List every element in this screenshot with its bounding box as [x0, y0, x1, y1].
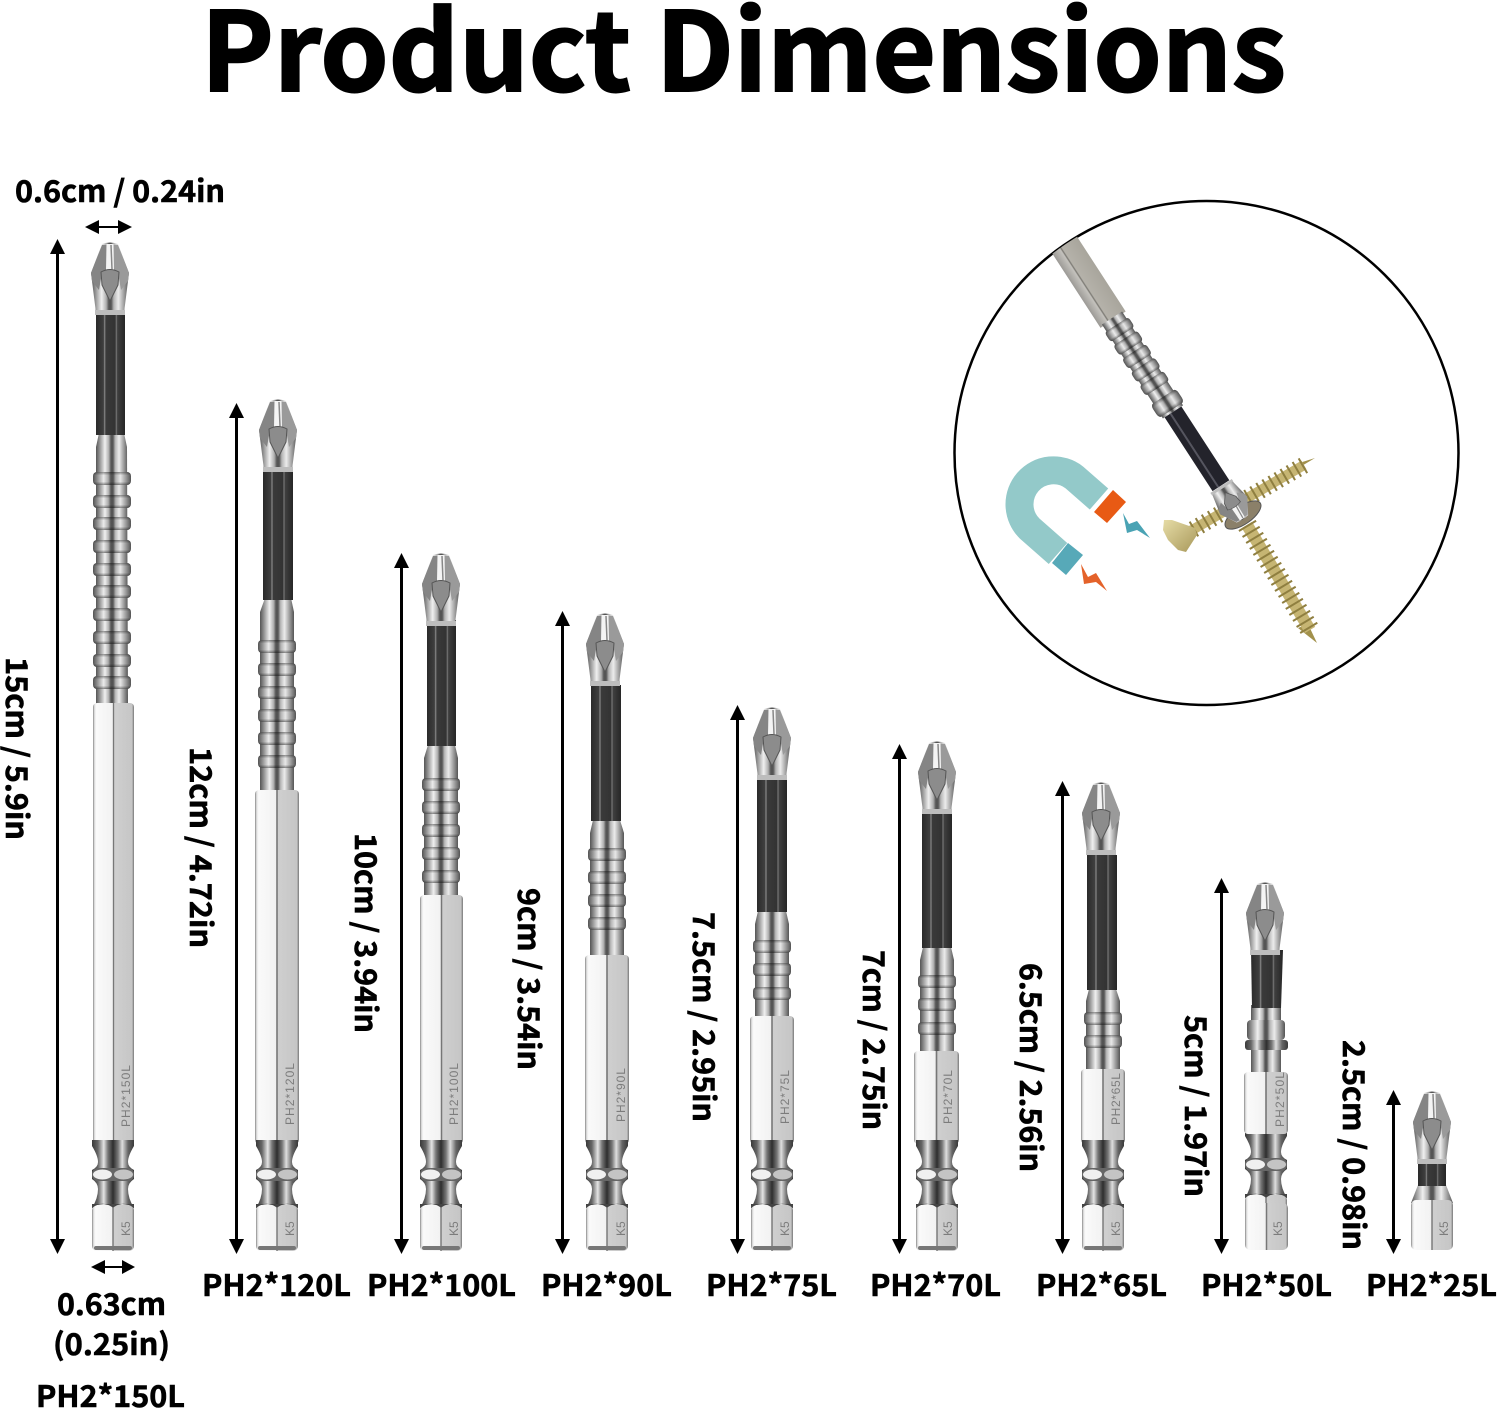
70L ribbed shank: [918, 947, 956, 1054]
height label: 7.5cm: 7.5cm / 2.95in: [684, 912, 728, 1122]
100L black band: [427, 620, 456, 746]
65L base: [1082, 1140, 1124, 1251]
height label: 10cm: 10cm / 3.94in: [346, 833, 390, 1033]
height label: 9cm: 9cm / 3.54in: [509, 888, 553, 1070]
bit in use: [1052, 236, 1248, 522]
50L engraving: PH2*50L: [1273, 1072, 1287, 1127]
150L K5: K5: [119, 1221, 133, 1236]
base width label: [53, 1280, 170, 1364]
90L base: [586, 1140, 628, 1251]
100L engraving: PH2*100L: [447, 1063, 461, 1125]
icon: horseshoe magnet: [1020, 470, 1150, 591]
bit: PH2*25L: [1411, 1092, 1453, 1250]
arrow: 12cm height: [229, 403, 244, 1254]
25L bottom hex: [1411, 1200, 1453, 1250]
75L tip: [753, 708, 791, 780]
70L hex shank: [914, 1051, 959, 1144]
65L engraving: PH2*65L: [1109, 1073, 1123, 1125]
height label: 12cm: 12cm / 4.72in: [181, 747, 225, 948]
120L black band: [263, 467, 293, 600]
25L K5: K5: [1437, 1221, 1451, 1236]
screw: horizontal: [1163, 458, 1315, 552]
screw: vertical: [1221, 496, 1317, 643]
150L base: [92, 1140, 134, 1251]
arrow: 5cm height: [1214, 878, 1229, 1254]
model label: PH2*25L: PH2*25L: [1366, 1261, 1497, 1305]
75L ribbed shank: [753, 911, 791, 1019]
100L base: [420, 1140, 462, 1251]
75L hex shank: [750, 1016, 794, 1144]
150L ribbed shank: [93, 433, 131, 705]
100L ribbed shank: [422, 745, 460, 897]
50L K5: K5: [1271, 1221, 1285, 1236]
base width label: (0.25in): [53, 1320, 170, 1364]
150L hex shank: [93, 703, 134, 1144]
100L tip: [422, 554, 460, 626]
25L black band: [1418, 1160, 1446, 1186]
65L tip: [1082, 782, 1120, 855]
50L black band: [1251, 950, 1283, 1008]
90L engraving: PH2*90L: [614, 1068, 628, 1122]
arrow: 9cm height: [555, 611, 570, 1254]
tip width label: 0.6cm / 0.24in: [15, 167, 225, 211]
100L hex shank: [420, 895, 463, 1144]
70L tip: [918, 742, 956, 814]
arrow: 10cm height: [394, 553, 409, 1254]
bit: PH2*100L: [420, 554, 463, 1251]
65L hex shank: [1081, 1069, 1125, 1144]
75L K5: K5: [778, 1221, 792, 1236]
25L flare: [1411, 1185, 1453, 1203]
65L ribbed shank: [1084, 989, 1122, 1072]
50L bottom hex: [1245, 1203, 1288, 1250]
70L K5: K5: [941, 1221, 955, 1236]
50L base: [1245, 1130, 1287, 1241]
70L base: [916, 1140, 958, 1251]
120L tip: [259, 400, 297, 472]
bit: PH2*65L: [1081, 782, 1125, 1251]
120L engraving: PH2*120L: [283, 1063, 297, 1125]
model label: PH2*90L: PH2*90L: [541, 1261, 672, 1305]
90L ribbed shank: [588, 820, 626, 957]
panel: magnetic tip circle: [954, 201, 1458, 705]
75L base: [751, 1140, 793, 1251]
arrow: tip width: [85, 220, 132, 234]
120L hex shank: [255, 790, 299, 1144]
height label: 6.5cm: 6.5cm / 2.56in: [1011, 963, 1055, 1172]
bit: PH2*75L: [750, 708, 794, 1251]
70L engraving: PH2*70L: [941, 1070, 955, 1124]
75L black band: [757, 778, 787, 912]
model label: PH2*50L: PH2*50L: [1201, 1261, 1332, 1305]
arrow: 15cm height: [50, 239, 65, 1254]
model label: PH2*120L: PH2*120L: [202, 1261, 351, 1305]
bit: PH2*150L: [91, 242, 134, 1251]
90L K5: K5: [614, 1221, 628, 1236]
90L black band: [591, 685, 621, 821]
90L hex shank: [585, 955, 629, 1144]
height label: 2.5cm: 2.5cm / 0.98in: [1334, 1040, 1378, 1250]
arrow: 7.5cm height: [730, 705, 745, 1254]
120L ribbed shank: [258, 598, 296, 792]
model label: PH2*70L: PH2*70L: [870, 1261, 1001, 1305]
model label: PH2*100L: PH2*100L: [367, 1261, 516, 1305]
120L base: [256, 1140, 298, 1251]
model label: PH2*65L: PH2*65L: [1036, 1261, 1167, 1305]
bit: PH2*70L: [914, 742, 959, 1251]
bit: PH2*90L: [585, 614, 629, 1251]
50L neck and collar: [1245, 1005, 1288, 1073]
25L tip: [1413, 1092, 1451, 1164]
65L K5: K5: [1109, 1221, 1123, 1236]
50L hex shank: [1244, 1072, 1288, 1134]
120L K5: K5: [283, 1221, 297, 1236]
100L K5: K5: [447, 1221, 461, 1236]
65L black band: [1087, 855, 1117, 990]
arrow: 2.5cm height: [1386, 1090, 1401, 1254]
75L engraving: PH2*75L: [778, 1070, 792, 1124]
base width label: 0.63cm: [57, 1280, 166, 1324]
arrow: 7cm height: [892, 744, 907, 1254]
model label: PH2*75L: PH2*75L: [706, 1261, 837, 1305]
arrow: base width: [91, 1260, 135, 1274]
150L black band: [96, 315, 125, 435]
50L tip: [1246, 882, 1284, 955]
bit: PH2*50L: [1244, 882, 1288, 1250]
90L tip: [586, 614, 624, 686]
bit: PH2*120L: [255, 400, 299, 1251]
150L engraving: PH2*150L: [119, 1065, 133, 1127]
70L black band: [922, 814, 952, 948]
height label: 7cm: 7cm / 2.75in: [854, 950, 898, 1130]
height label: 5cm: 5cm / 1.97in: [1176, 1015, 1220, 1197]
arrow: 6.5cm height: [1055, 781, 1070, 1254]
150L tip: [91, 242, 129, 315]
